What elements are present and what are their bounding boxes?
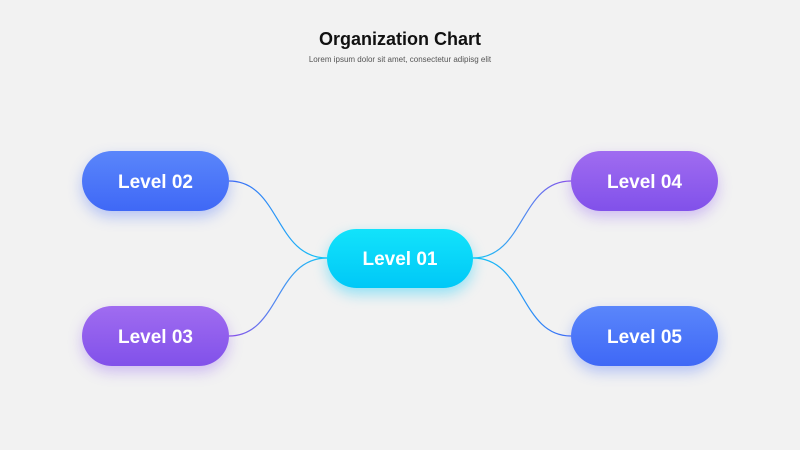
node: Level 04 (571, 151, 718, 211)
node: Level 03: Level 03 (118, 326, 193, 348)
node: Level 05 (571, 306, 718, 366)
node: Level 02 (82, 151, 229, 211)
title: Organization Chart (319, 29, 481, 49)
subtitle: Lorem ipsum dolor sit amet, consectetur adipisg elit (309, 55, 491, 64)
node: Level 01: Level 01 (362, 249, 438, 270)
node: Level 05: Level 05 (607, 326, 682, 348)
node: Level 03 (82, 306, 229, 366)
node: Level 01 (327, 229, 473, 288)
node: Level 04: Level 04 (607, 172, 682, 192)
node: Level 02: Level 02 (118, 172, 193, 192)
